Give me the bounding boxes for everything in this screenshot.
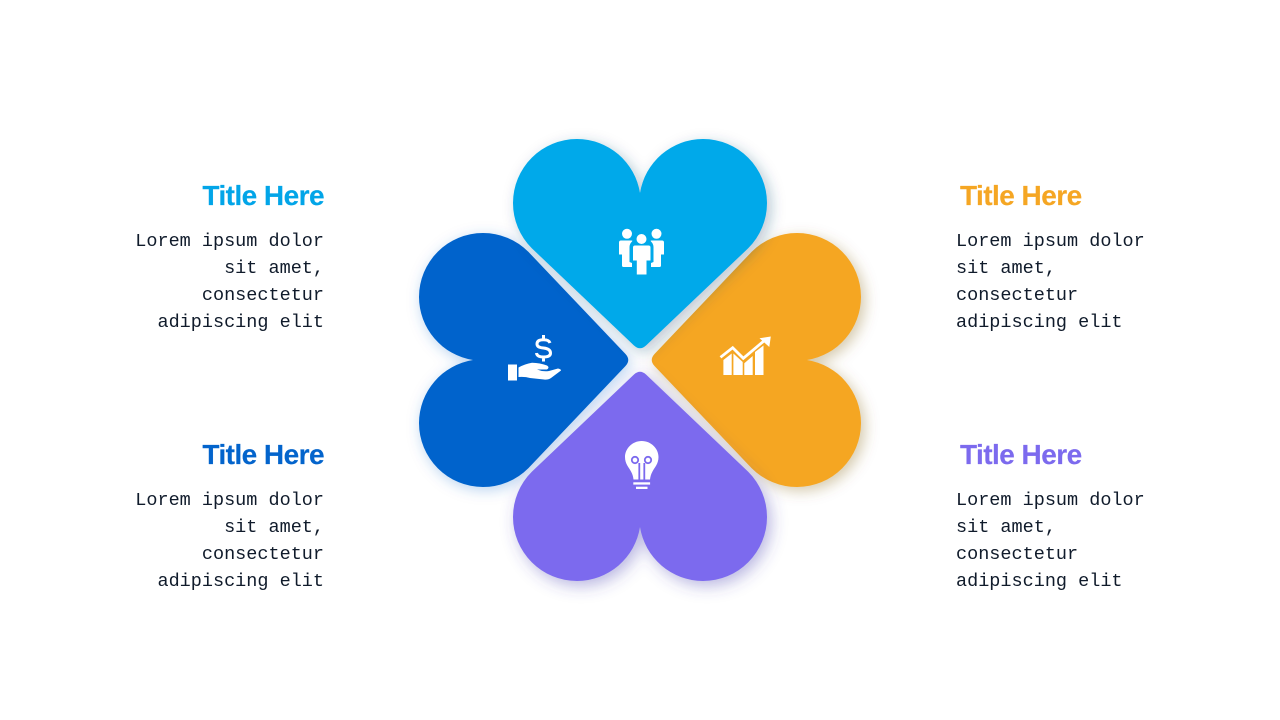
title: top left: Title Here [202, 180, 324, 210]
panel: orange heart [652, 233, 861, 487]
text: top right: Lorem ipsum dolor sit amet, consectetur adipiscing elit [956, 231, 1145, 333]
text: top left: Lorem ipsum dolor sit amet, consectetur adipiscing elit [135, 231, 324, 333]
title: bottom left: Title Here [202, 438, 324, 470]
icon: light bulb [625, 441, 658, 489]
icon: growth chart [720, 336, 771, 375]
title: bottom right: Title Here [960, 438, 1082, 470]
panel: blue heart [419, 233, 628, 487]
icon: people [619, 229, 664, 274]
text: bottom left: Lorem ipsum dolor sit amet, consectetur adipiscing elit [135, 490, 324, 592]
title: top right: Title Here [960, 180, 1082, 210]
panel: light blue heart [513, 139, 767, 348]
icon: hand with dollar [508, 335, 561, 380]
panel: purple heart [513, 372, 767, 581]
text: bottom right: Lorem ipsum dolor sit amet, consectetur adipiscing elit [956, 490, 1145, 592]
